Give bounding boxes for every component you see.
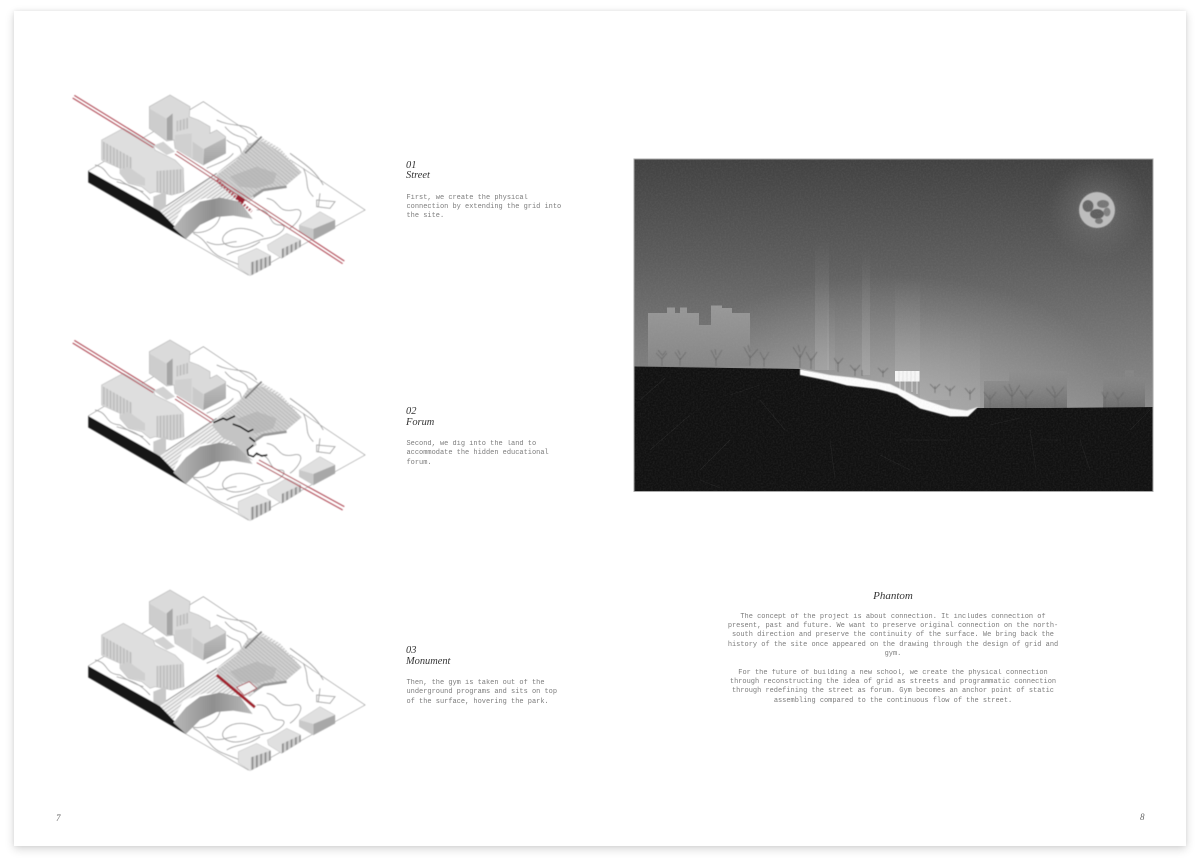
forum black edge (213, 416, 267, 457)
ground section (634, 366, 1153, 492)
moon halo (1064, 174, 1131, 241)
step 02 text: Second, we dig into the land to (406, 440, 536, 448)
step 03 number and title (406, 645, 451, 666)
step 01 text: First, we create the physical (406, 194, 528, 202)
step 02 text: accommodate the hidden educational (406, 449, 549, 457)
step 03 text: Then, the gym is taken out of the (406, 679, 545, 687)
concept paragraph 2: assembling compared to the continuous flow of the street. (774, 697, 1012, 705)
concept paragraph 1 (728, 612, 1058, 658)
step 01 number and title: Street (406, 170, 430, 181)
photo frame (634, 159, 1153, 492)
step 01 text (406, 194, 561, 220)
page number 8: 8 (1140, 812, 1144, 822)
step 01 text: the site. (406, 212, 444, 220)
step 03 text (406, 679, 557, 706)
diagram 01: street axonometric (73, 95, 365, 276)
red street grid line (73, 95, 344, 264)
concept paragraph 2: For the future of building a new school, we create the physical connection (738, 668, 1048, 676)
page number 7: 7 (56, 813, 60, 823)
concept paragraph 1: gym. (885, 650, 901, 658)
step 01 text: connection by extending the grid into (406, 203, 561, 211)
concept paragraph 1: The concept of the project is about connection. It includes connection of (740, 612, 1046, 620)
lit white street ribbon (800, 369, 978, 416)
trees (656, 345, 1124, 400)
red street segments (73, 340, 344, 510)
gym volume (237, 682, 257, 695)
sky centre glow (722, 296, 1058, 410)
diagram 03: monument axonometric (88, 590, 365, 771)
step 02 number and title: 02 (406, 406, 416, 417)
ghost buildings right (984, 381, 1145, 408)
step 02 number and title: Forum (406, 416, 434, 428)
ghost towers left (648, 306, 750, 366)
concept paragraph 1: history of the site once appeared on the drawing through the design of grid and (728, 641, 1058, 649)
step 01 number and title: 01 (406, 160, 416, 170)
concept paragraph 1: present, past and future. We want to preserve original connection on the north- (728, 622, 1058, 630)
ground scratches (640, 378, 1150, 488)
moon (1079, 192, 1115, 228)
step 02 number and title (406, 406, 434, 428)
step 03 text: of the surface, hovering the park. (406, 698, 549, 706)
step 03 number and title: Monument (406, 656, 450, 666)
concept paragraph 2: through redefining the street as forum. Gym becomes an anchor point of static (732, 687, 1054, 695)
project title: Phantom (873, 590, 913, 602)
section photo panel (634, 159, 1153, 515)
film grain (634, 159, 1153, 492)
concept paragraph 2: through reconstructing the idea of grid as streets and programmatic connection (730, 678, 1056, 686)
gym building (895, 371, 920, 394)
red gym bar (217, 675, 255, 707)
step 02 text (406, 440, 549, 467)
light beams (815, 282, 950, 400)
diagram 02: forum axonometric (73, 340, 365, 521)
step 01 number and title (406, 160, 430, 181)
concept paragraph 1: south direction and preserve the continuity of the surface. We bring back the (732, 631, 1054, 639)
concept paragraph 2 (730, 668, 1056, 705)
step 03 number and title: 03 (406, 645, 416, 656)
excavated forum floor (212, 416, 257, 461)
step 02 text: forum. (406, 459, 432, 467)
step 03 text: underground programs and sits on top (406, 688, 557, 696)
